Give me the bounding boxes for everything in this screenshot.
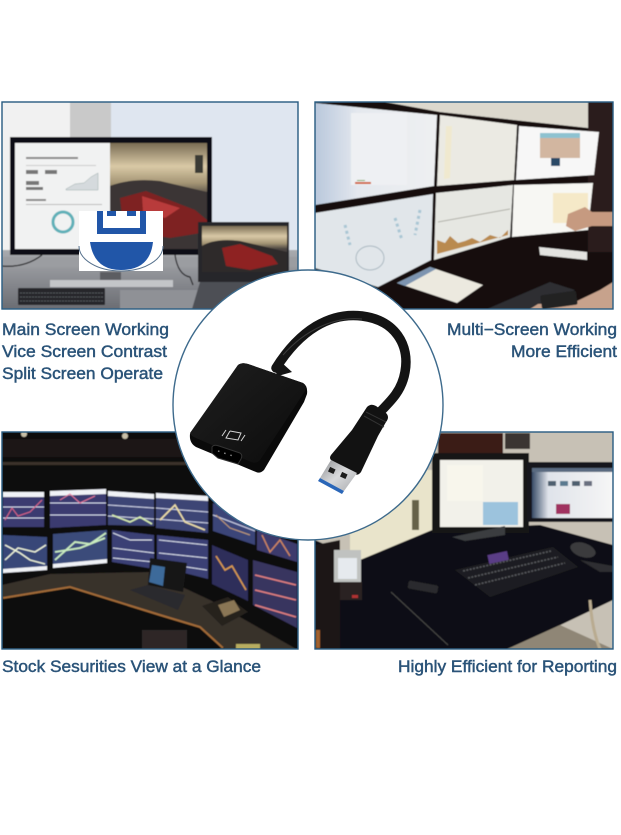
panel: multi-screen working photo bbox=[315, 102, 613, 309]
trading desk bbox=[2, 572, 298, 650]
upper row of trading monitors bbox=[3, 489, 297, 562]
keyboard bbox=[455, 547, 578, 597]
caption: highly efficient reporting: Highly Efficient for Reporting bbox=[398, 658, 617, 676]
caption: multi-screen working: Multi−Screen Working bbox=[447, 321, 617, 339]
mouse bbox=[570, 542, 596, 558]
hdmi port bbox=[212, 445, 242, 464]
lower row of trading monitors bbox=[3, 530, 297, 628]
lower left screen bbox=[315, 194, 433, 287]
keyboard bbox=[487, 282, 575, 309]
black desk bbox=[315, 525, 613, 649]
upper right screen bbox=[516, 126, 599, 180]
usb plug bbox=[318, 405, 388, 494]
upper left screen bbox=[315, 103, 437, 205]
caption: multi-screen working: More Efficient bbox=[511, 343, 617, 361]
remote bbox=[408, 580, 438, 594]
caption: main screen working: Split Screen Operate bbox=[2, 365, 163, 383]
monitor stand bbox=[100, 272, 121, 281]
caption: main screen working: Main Screen Working bbox=[2, 321, 169, 339]
caption: stock securities: Stock Sesurities View at a Glance bbox=[2, 658, 261, 676]
upper middle screen bbox=[437, 115, 517, 186]
lower middle screen bbox=[434, 185, 513, 260]
laptop on desk bbox=[148, 558, 187, 592]
caption: multi-screen working bbox=[447, 321, 617, 361]
cable boot on adapter bbox=[272, 362, 292, 376]
laptop bbox=[192, 222, 295, 309]
hand bbox=[566, 207, 613, 231]
monitor bbox=[10, 137, 212, 255]
backup drive bbox=[334, 550, 361, 582]
lower right screen bbox=[512, 183, 593, 237]
desk phone bbox=[202, 597, 248, 626]
icon: display glyph bbox=[222, 430, 245, 441]
arm bbox=[530, 282, 613, 309]
power strip bbox=[539, 247, 587, 260]
adapter body bbox=[190, 363, 307, 473]
panel: main screen working photo bbox=[2, 102, 298, 309]
notebook bbox=[397, 267, 483, 303]
caption: main screen working: Vice Screen Contrast bbox=[2, 343, 167, 361]
icon: blue plug overlay bbox=[79, 211, 163, 271]
keyboard bbox=[18, 288, 105, 305]
secondary monitor bbox=[527, 462, 613, 522]
panel: stock securities photo bbox=[2, 431, 298, 650]
caption: main screen working bbox=[2, 321, 169, 383]
panel: highly efficient reporting photo bbox=[315, 432, 613, 649]
main monitor bbox=[432, 453, 529, 541]
cable bbox=[276, 315, 406, 414]
center circle with adapter bbox=[173, 270, 443, 540]
